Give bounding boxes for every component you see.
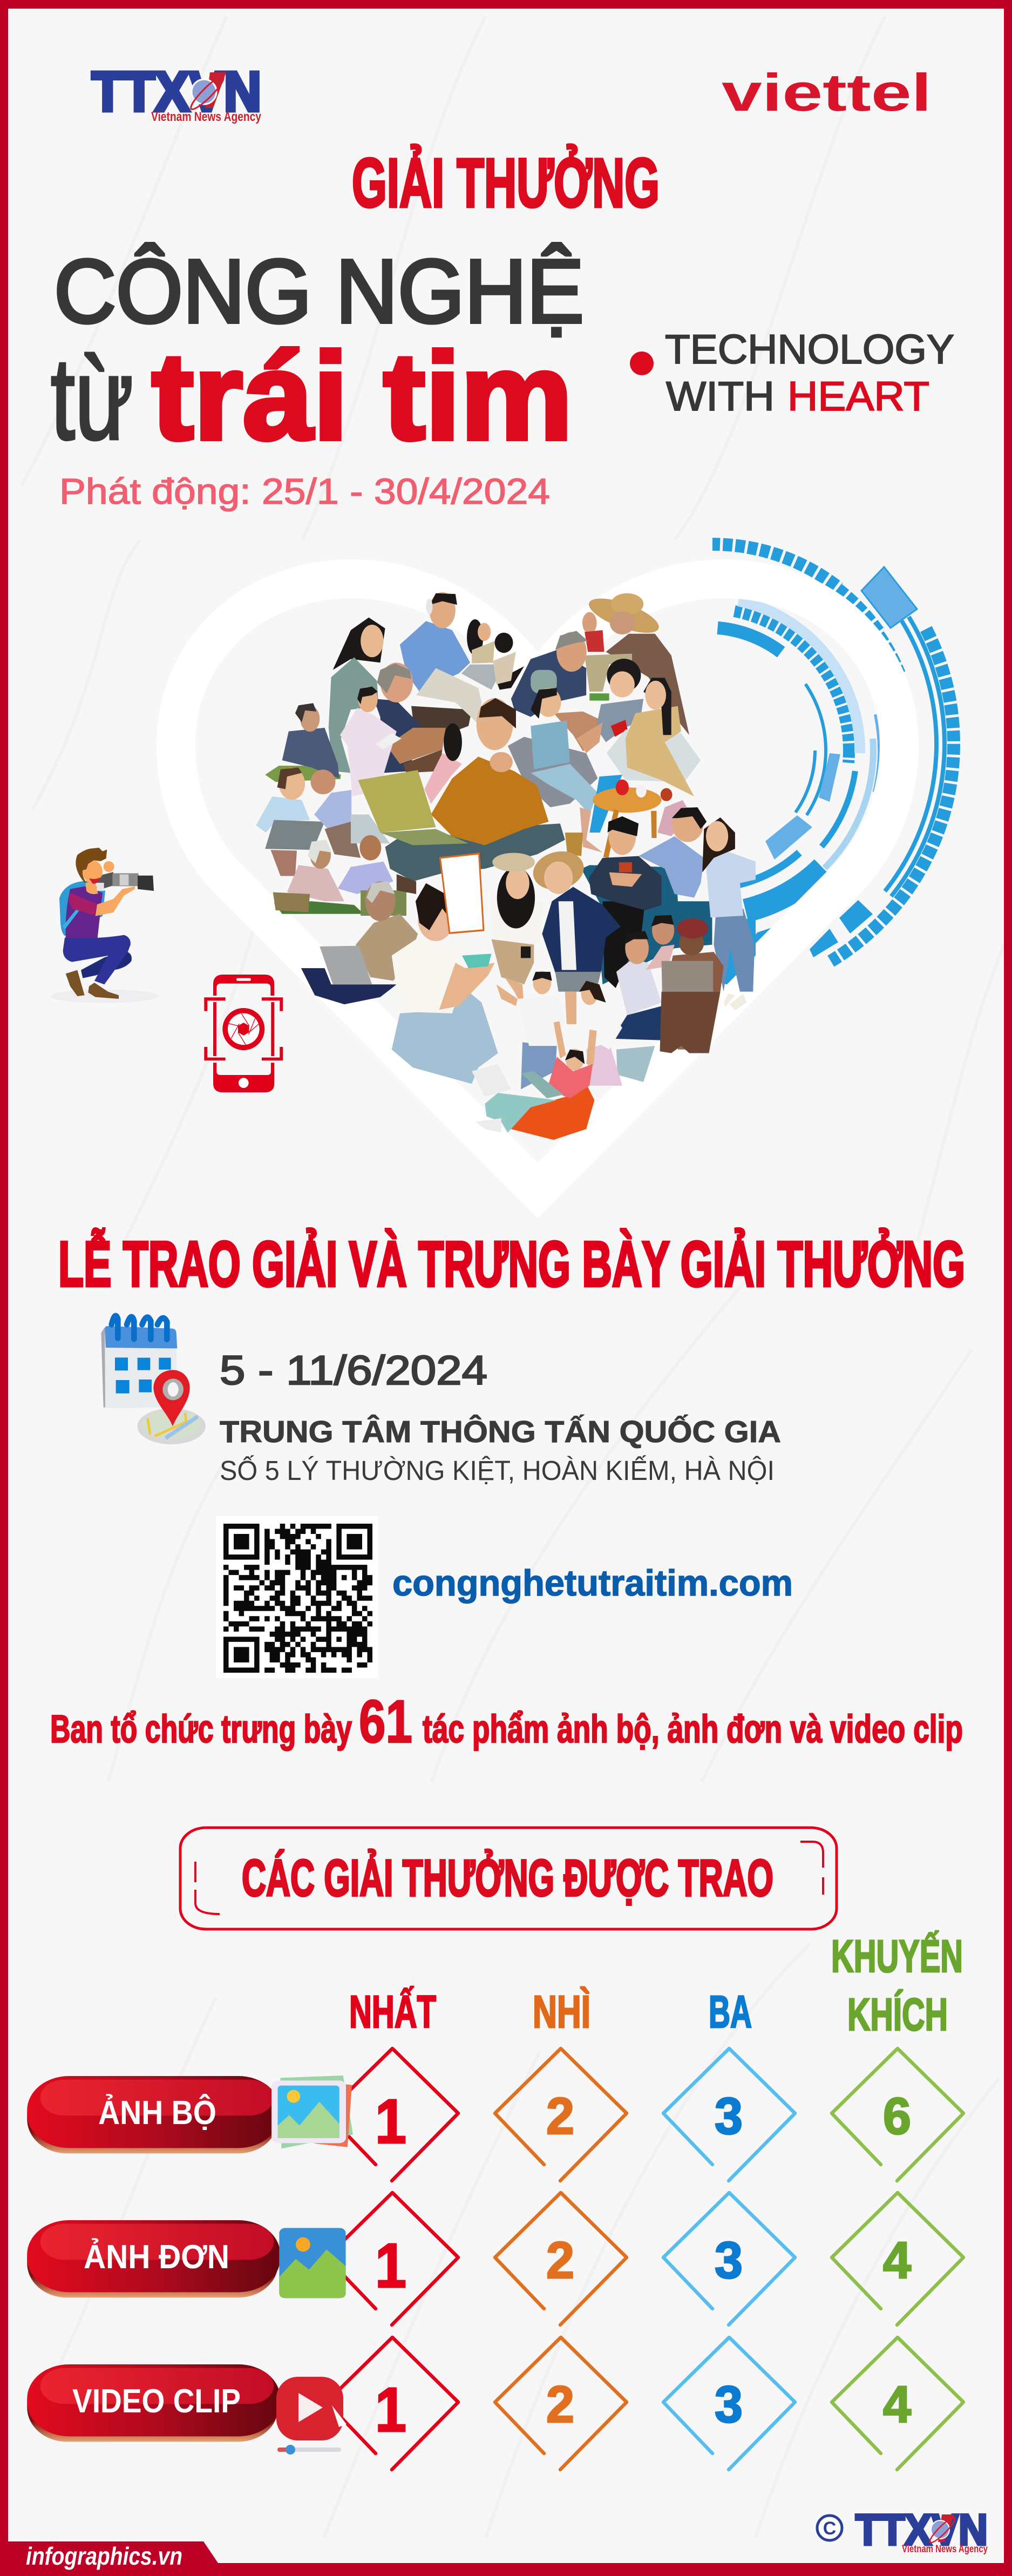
- calendar page: [101, 1327, 177, 1408]
- mouth: [89, 877, 100, 884]
- backpack: [59, 881, 105, 936]
- calendar cells: [115, 1357, 171, 1394]
- panel: awards heading: [180, 1828, 837, 1929]
- logo: viettel: viettel: [722, 63, 932, 122]
- row: VIDEO CLIP: [27, 2364, 347, 2455]
- shadow: [50, 989, 158, 1003]
- row: ẢNH ĐƠN: [27, 2220, 346, 2298]
- arm: [96, 887, 135, 916]
- title: trái tim: trái tim: [152, 327, 573, 465]
- footer tab: infographics.vn: infographics.vn: [26, 2542, 182, 2570]
- shoes: [66, 970, 85, 996]
- row: VIDEO CLIP: VIDEO CLIP: [72, 2383, 241, 2420]
- exhibition note: 61: [359, 1688, 412, 1755]
- slogan: TECHNOLOGY WITH HEART: [665, 327, 954, 420]
- award counts: [375, 2086, 911, 2445]
- phone sides: [213, 1002, 216, 1056]
- title: từ: từ: [51, 333, 133, 464]
- map pin: [153, 1370, 190, 1426]
- copyright logo: TTXVN: Vietnam News Agency: [902, 2544, 988, 2555]
- award counts: 1: [375, 2375, 406, 2445]
- row: ẢNH ĐƠN: ẢNH ĐƠN: [84, 2239, 229, 2276]
- row: ẢNH BỘ: [27, 2075, 353, 2153]
- award counts: 2: [546, 2232, 574, 2289]
- red dot: [630, 351, 654, 375]
- sleeve: [69, 893, 97, 915]
- venue address: SỐ 5 LÝ THƯỜNG KIỆT, HOÀN KIẾM, HÀ NỘI: [220, 1455, 775, 1486]
- award counts: 3: [715, 2232, 743, 2289]
- date: 5 - 11/6/2024: [220, 1348, 487, 1394]
- people collage: [256, 591, 756, 1140]
- icon: photo stack: [271, 2075, 353, 2148]
- copyright logo: TTXVN: C: [823, 2518, 836, 2539]
- slogan: TECHNOLOGY WITH HEART: TECHNOLOGY: [665, 327, 954, 373]
- back leg: [81, 951, 132, 978]
- award counts: 4: [883, 2232, 911, 2289]
- exhibition note: Ban tổ chức trưng bày: [50, 1708, 352, 1751]
- calendar header: [105, 1326, 177, 1348]
- camera: [97, 872, 113, 889]
- award counts: 1: [375, 2086, 406, 2156]
- award counts: 4: [883, 2376, 911, 2433]
- icon: single photo: [279, 2228, 346, 2298]
- scan brackets: [204, 997, 283, 1060]
- slogan: TECHNOLOGY WITH HEART: HEART: [787, 374, 929, 420]
- title: CÔNG NGHỆ: CÔNG NGHỆ: [54, 241, 584, 342]
- hand: [104, 861, 114, 872]
- logo: TTXVN: Vietnam News Agency: [151, 110, 262, 124]
- map base: [137, 1408, 206, 1444]
- award counts: 3: [715, 2376, 743, 2433]
- column labels: NHẤT: [349, 1986, 436, 2037]
- column labels: BA: [709, 1986, 752, 2037]
- award counts: 2: [546, 2376, 574, 2433]
- phone camera icon: [204, 975, 283, 1092]
- phone bottom: [213, 1063, 274, 1092]
- aperture: [222, 1008, 264, 1050]
- website: congnghetutraitim.com: [392, 1563, 793, 1604]
- column labels: [349, 1931, 963, 2040]
- calendar rings: [112, 1316, 167, 1340]
- hair: [76, 848, 107, 883]
- column labels: NHÌ: [533, 1986, 590, 2037]
- award counts: 2: [546, 2087, 574, 2145]
- front leg: [63, 935, 131, 984]
- icon: video play: [276, 2377, 347, 2455]
- icon: calendar and map pin: [101, 1316, 206, 1444]
- slogan: TECHNOLOGY WITH HEART: WITH: [666, 374, 775, 420]
- award counts: 1: [375, 2230, 406, 2301]
- row: ẢNH BỘ: ẢNH BỘ: [98, 2094, 216, 2132]
- neck and head: [85, 882, 98, 894]
- column labels: KHÍCH: [847, 1989, 948, 2040]
- shirt: [65, 887, 103, 941]
- award counts: 3: [715, 2087, 743, 2145]
- launch date: Phát động: 25/1 - 30/4/2024: [59, 471, 550, 512]
- QR code: [216, 1516, 378, 1678]
- tech arcs: [712, 538, 960, 966]
- white heart outline: [176, 579, 899, 1191]
- award diamonds: [327, 2048, 963, 2470]
- copyright logo: TTXVN: TTXVN: [855, 2506, 988, 2554]
- award counts: 6: [883, 2087, 911, 2145]
- photographer illustration: [50, 848, 158, 1003]
- exhibition note: [50, 1688, 963, 1755]
- logo: TTXVN: TTXVN: [92, 60, 261, 123]
- title: GIẢI THƯỞNG: GIẢI THƯỞNG: [352, 144, 660, 222]
- phone top: [213, 975, 274, 996]
- venue name: TRUNG TÂM THÔNG TẤN QUỐC GIA: [220, 1414, 781, 1449]
